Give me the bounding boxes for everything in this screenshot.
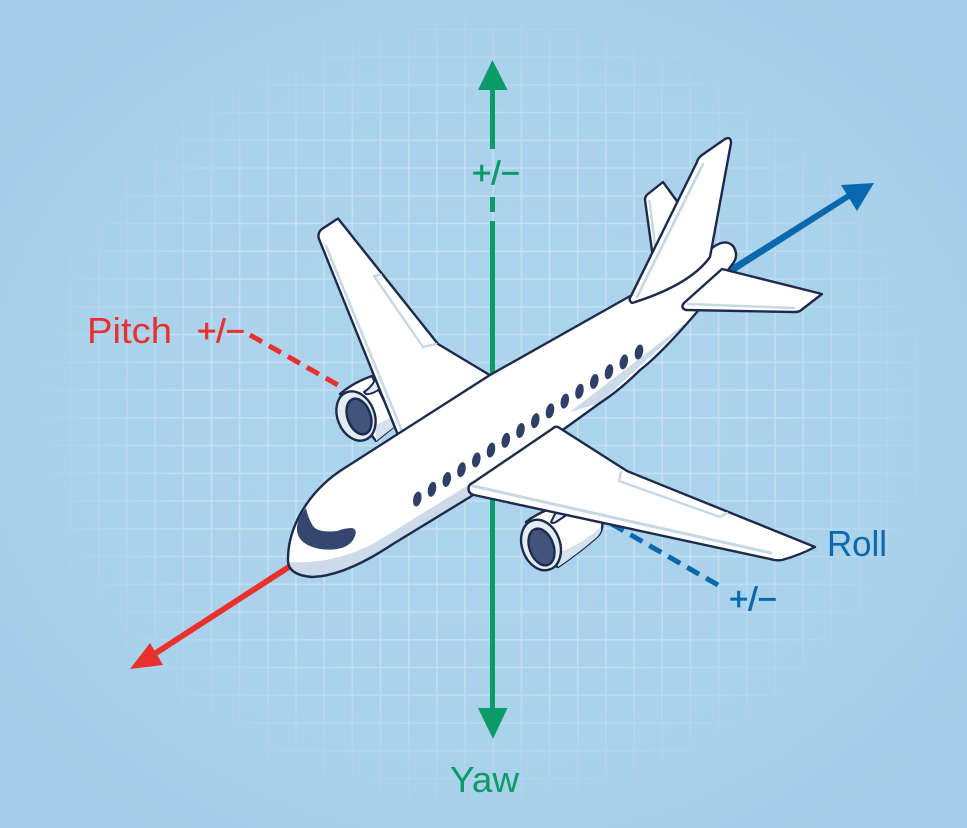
near wing bbox=[469, 427, 815, 560]
cabin windows bbox=[412, 344, 645, 507]
pitch axis arrow bbox=[130, 564, 291, 669]
rear vertical stabilizer bbox=[645, 182, 679, 258]
label: yaw: Yaw bbox=[450, 759, 520, 800]
label: pitch sign: +/− bbox=[197, 313, 245, 349]
far wing bbox=[318, 218, 500, 445]
belly shading bbox=[290, 484, 482, 576]
label: roll: Roll bbox=[827, 523, 887, 564]
horizontal stabilizer bbox=[682, 269, 822, 312]
pitch dashed indicator bbox=[250, 335, 338, 385]
near engine bbox=[514, 508, 602, 576]
grid bbox=[84, 50, 884, 768]
roll dashed indicator bbox=[610, 523, 718, 585]
vertical stabilizer bbox=[630, 138, 731, 303]
fuselage bbox=[288, 242, 736, 577]
label: pitch: Pitch bbox=[87, 310, 172, 351]
cockpit windshield bbox=[297, 508, 356, 550]
airplane bbox=[288, 138, 822, 577]
roll axis arrow bbox=[728, 183, 874, 274]
label: yaw sign: +/− bbox=[472, 155, 520, 191]
yaw axis arrow bbox=[478, 60, 508, 739]
label: roll sign: +/− bbox=[729, 581, 777, 617]
far engine bbox=[329, 376, 396, 447]
